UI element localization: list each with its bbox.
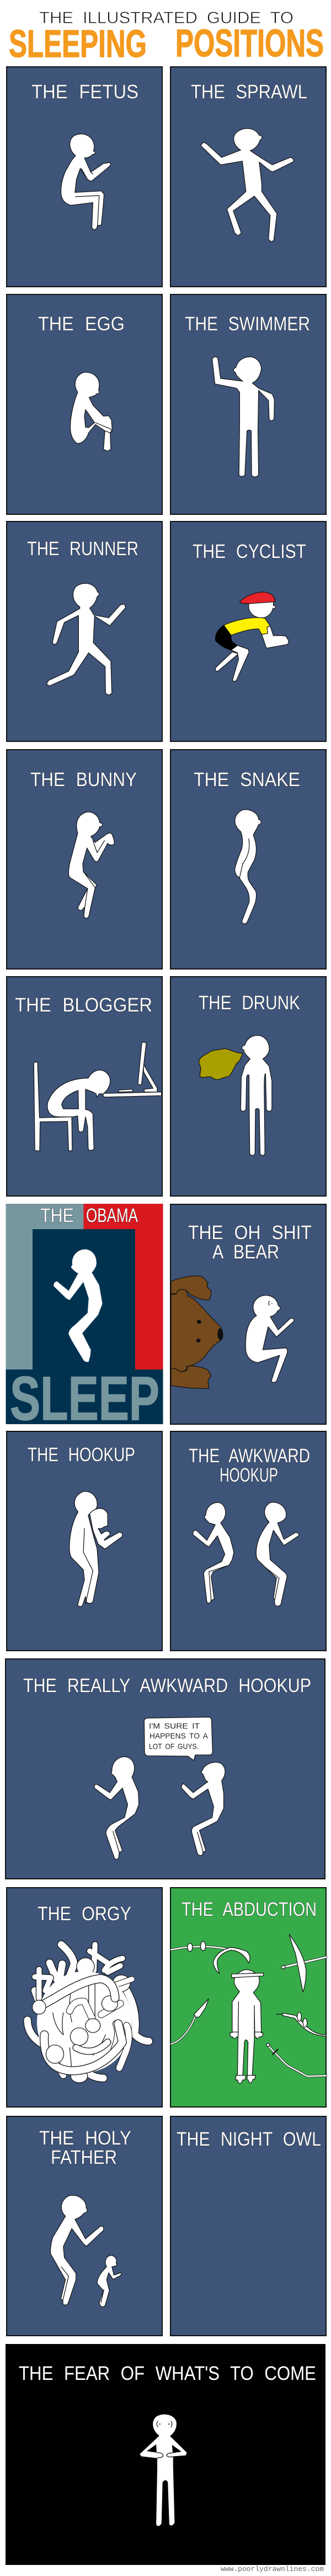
panel: the snake	[170, 750, 326, 969]
figure: swimmer	[212, 357, 274, 477]
panel: the cyclist	[170, 521, 326, 741]
figures: awkward couple	[193, 1502, 299, 1606]
instrument: syringe	[276, 2013, 326, 2036]
label: the holy father: THE HOLY	[39, 2127, 131, 2149]
figure: snake	[235, 810, 261, 924]
panel: the runner	[7, 521, 162, 741]
cyclist arms	[261, 626, 289, 648]
cyclist cap	[239, 592, 275, 604]
cyclist head	[249, 601, 276, 618]
label: the swimmer: THE SWIMMER	[185, 313, 310, 335]
figure: fearful sleeper	[140, 2415, 187, 2526]
cyclist legs	[215, 652, 238, 672]
panel: the fear of what's to come	[6, 2344, 325, 2565]
figures: hookup couple	[70, 1492, 122, 1606]
figure: abducted person strapped down	[230, 1969, 264, 2084]
sleeping blogger	[47, 1070, 110, 1150]
cyclist jersey	[224, 618, 270, 635]
panel: the swimmer	[170, 294, 326, 514]
panel: the orgy	[7, 1888, 162, 2107]
label: the snake: THE SNAKE	[194, 769, 300, 791]
chair	[34, 1062, 72, 1151]
speech bubble: LOT OF GUYS.	[149, 1742, 199, 1751]
panel: the really awkward hookup	[6, 1659, 325, 1879]
figure: blogger at desk	[34, 1042, 162, 1151]
label: the obama: OBAMA	[86, 1205, 138, 1226]
label: the blogger: THE BLOGGER	[15, 994, 152, 1016]
figure: cyclist	[215, 592, 289, 681]
label: the awkward hookup: HOOKUP	[220, 1465, 278, 1486]
label: the oh shit a bear	[188, 1222, 312, 1263]
panel: the drunk	[170, 977, 326, 1196]
instrument: probe	[266, 2043, 326, 2076]
title line: the illustrated guide to: THE ILLUSTRATED GUIDE TO	[39, 9, 293, 27]
figure: egg	[70, 372, 113, 451]
label: the orgy: THE ORGY	[38, 1903, 131, 1925]
footer credit: www.poorlydrawnlines.com	[221, 2565, 324, 2573]
panel: the abduction	[170, 1888, 326, 2107]
panel: the sprawl	[170, 67, 326, 287]
speech bubble: I'M SURE IT	[149, 1721, 200, 1730]
alien instruments	[171, 1935, 326, 2076]
drunk person	[241, 1035, 272, 1156]
panel: the egg	[7, 294, 162, 514]
poster word: sleep: SLEEP	[10, 1364, 159, 1433]
cyclist shorts	[215, 625, 237, 650]
panel: the blogger	[7, 977, 162, 1196]
panel: the night owl	[170, 2116, 326, 2336]
label: the oh shit a bear: THE OH SHIT	[188, 1222, 312, 1244]
figure: drunk vomiting	[199, 1035, 272, 1156]
instrument: saw	[171, 1999, 209, 2044]
instrument: claw arm	[171, 1941, 250, 1974]
figures: father and child	[50, 2195, 121, 2307]
panel: the fetus	[7, 67, 162, 287]
figure: runner	[46, 583, 126, 695]
label: the obama: THE	[40, 1205, 74, 1226]
speech bubble	[144, 1717, 212, 1761]
figure: fetus	[61, 134, 111, 230]
panel: the bunny	[7, 750, 162, 969]
figure: bunny	[68, 812, 114, 918]
desk	[103, 1092, 162, 1097]
figure: frightened sleeper	[245, 1295, 294, 1382]
label: the holy father: FATHER	[51, 2147, 117, 2168]
title word: sleeping: SLEEPING	[9, 22, 147, 65]
panel: the oh shit a bear	[170, 1204, 326, 1424]
label: the sprawl: THE SPRAWL	[191, 81, 307, 103]
label: the cyclist: THE CYCLIST	[193, 541, 306, 562]
label: the bunny: THE BUNNY	[30, 769, 137, 791]
keyboard	[119, 1089, 132, 1092]
bear	[171, 1276, 223, 1388]
figures: two sleepers	[94, 1757, 225, 1859]
label: the oh shit a bear: A BEAR	[212, 1241, 279, 1263]
figure: obama pose	[54, 1250, 103, 1362]
label: the drunk: THE DRUNK	[199, 992, 300, 1014]
label: the runner: THE RUNNER	[27, 538, 138, 560]
panel: the obama sleep poster	[6, 1204, 163, 1433]
figure: sprawl	[201, 129, 293, 242]
panel: the awkward hookup	[170, 1431, 326, 1651]
label: the holy father	[39, 2127, 131, 2168]
label: the hookup: THE HOOKUP	[28, 1444, 135, 1466]
panel: the hookup	[7, 1431, 162, 1651]
monitor	[143, 1065, 157, 1092]
speech bubble: HAPPENS TO A	[150, 1731, 209, 1740]
figures: tangled pile	[28, 1945, 149, 2083]
label: the awkward hookup	[189, 1445, 310, 1486]
vomit	[199, 1049, 243, 1079]
label: the egg: THE EGG	[38, 313, 125, 335]
label: the fetus: THE FETUS	[31, 81, 138, 103]
label: the obama	[40, 1205, 138, 1226]
instrument: blade	[281, 1935, 326, 1992]
panel: the holy father	[7, 2116, 162, 2336]
title	[9, 9, 324, 65]
